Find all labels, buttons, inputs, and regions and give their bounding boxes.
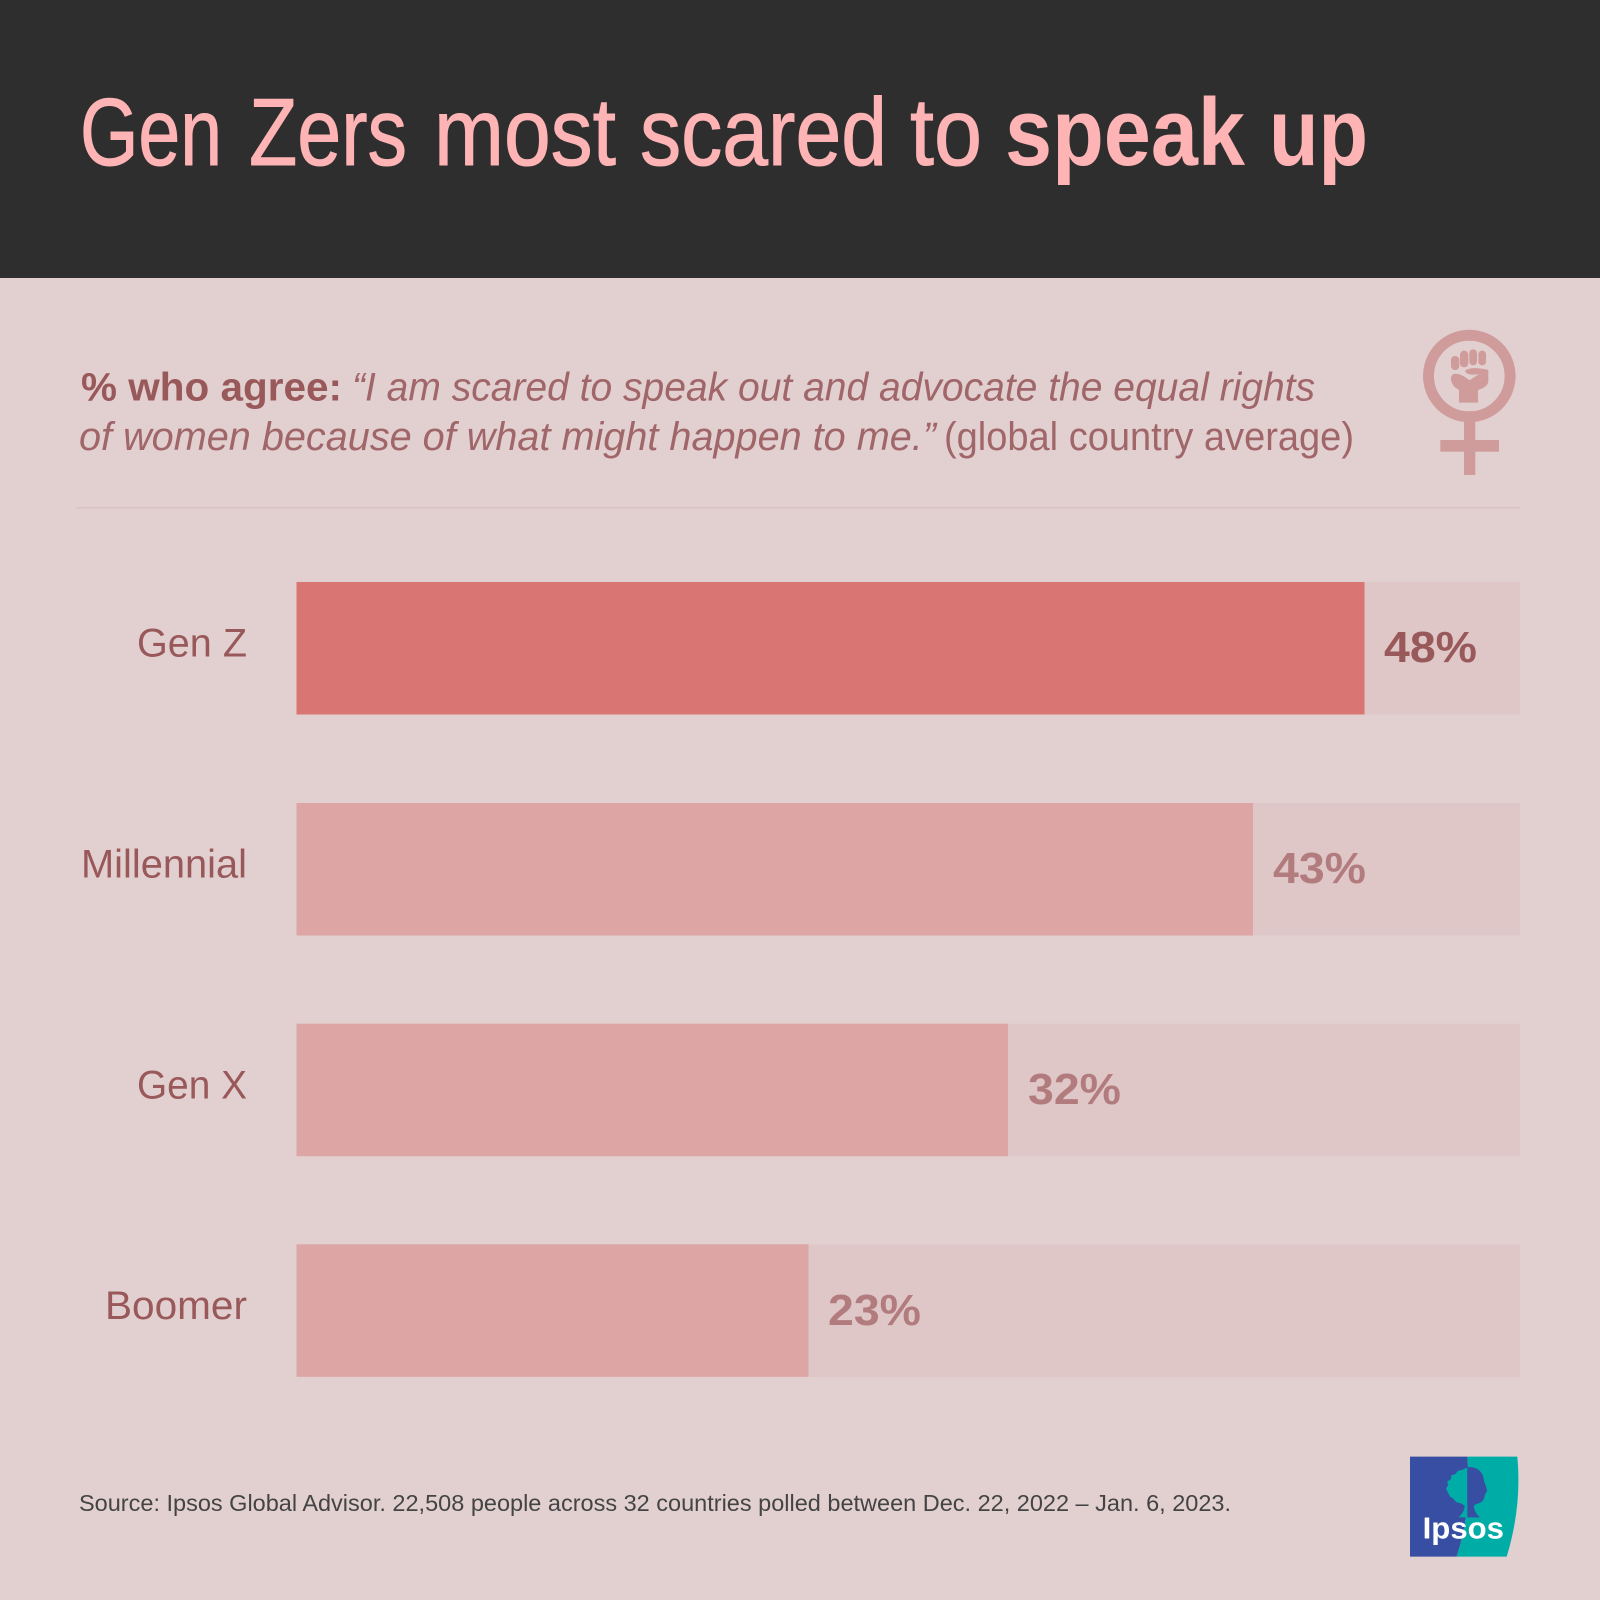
title: speak <box>1005 79 1246 186</box>
title: to <box>910 79 982 186</box>
bar row: Boomer 23%: 23% <box>828 1286 921 1335</box>
bar row: Gen Z 48%: 48% <box>1384 623 1477 672</box>
source note: Source: Ipsos Global Advisor. 22,508 people across 32 countries polled between Dec. 22, 2022 – Jan. 6, 2023. <box>79 1490 1231 1516</box>
title: most <box>434 79 616 186</box>
title: Gen <box>80 79 222 186</box>
subtitle: survey statement: of women because of what might happen to me.” <box>79 415 938 459</box>
logo: Ipsos <box>1410 1457 1518 1557</box>
subtitle: survey statement: “I am scared to speak out and advocate the equal rights <box>352 366 1315 410</box>
divider <box>76 507 1520 508</box>
bar row: Gen X 32%: Gen X <box>137 1064 247 1108</box>
bar row: Gen X 32% <box>137 1024 1520 1156</box>
icon: head profile half <box>1467 1467 1487 1517</box>
title <box>80 79 1368 186</box>
header band with title <box>0 0 1600 278</box>
bar row: Millennial 43%: Millennial <box>81 842 247 886</box>
subtitle: survey statement: % who agree: <box>81 366 342 410</box>
subtitle: survey statement: (global country average) <box>944 415 1354 459</box>
bar row: Millennial 43% <box>81 803 1520 936</box>
title: up <box>1269 79 1368 186</box>
bar row: Gen Z 48%: Gen Z <box>137 622 247 666</box>
title: Zers <box>249 79 407 186</box>
bar row: Boomer 23%: Boomer <box>105 1284 247 1328</box>
subtitle: survey statement <box>79 366 1354 459</box>
bar row: Boomer 23% <box>105 1244 1520 1377</box>
bar row: Gen X 32%: 32% <box>1028 1065 1121 1114</box>
title: scared <box>640 79 887 186</box>
bar row: Millennial 43%: 43% <box>1273 844 1366 893</box>
icon: tree canopy half <box>1446 1467 1467 1517</box>
icon: female symbol with raised fist <box>1428 335 1510 475</box>
logo wordmark: Ipsos <box>1423 1512 1504 1546</box>
bar row: Gen Z 48% <box>137 582 1520 714</box>
